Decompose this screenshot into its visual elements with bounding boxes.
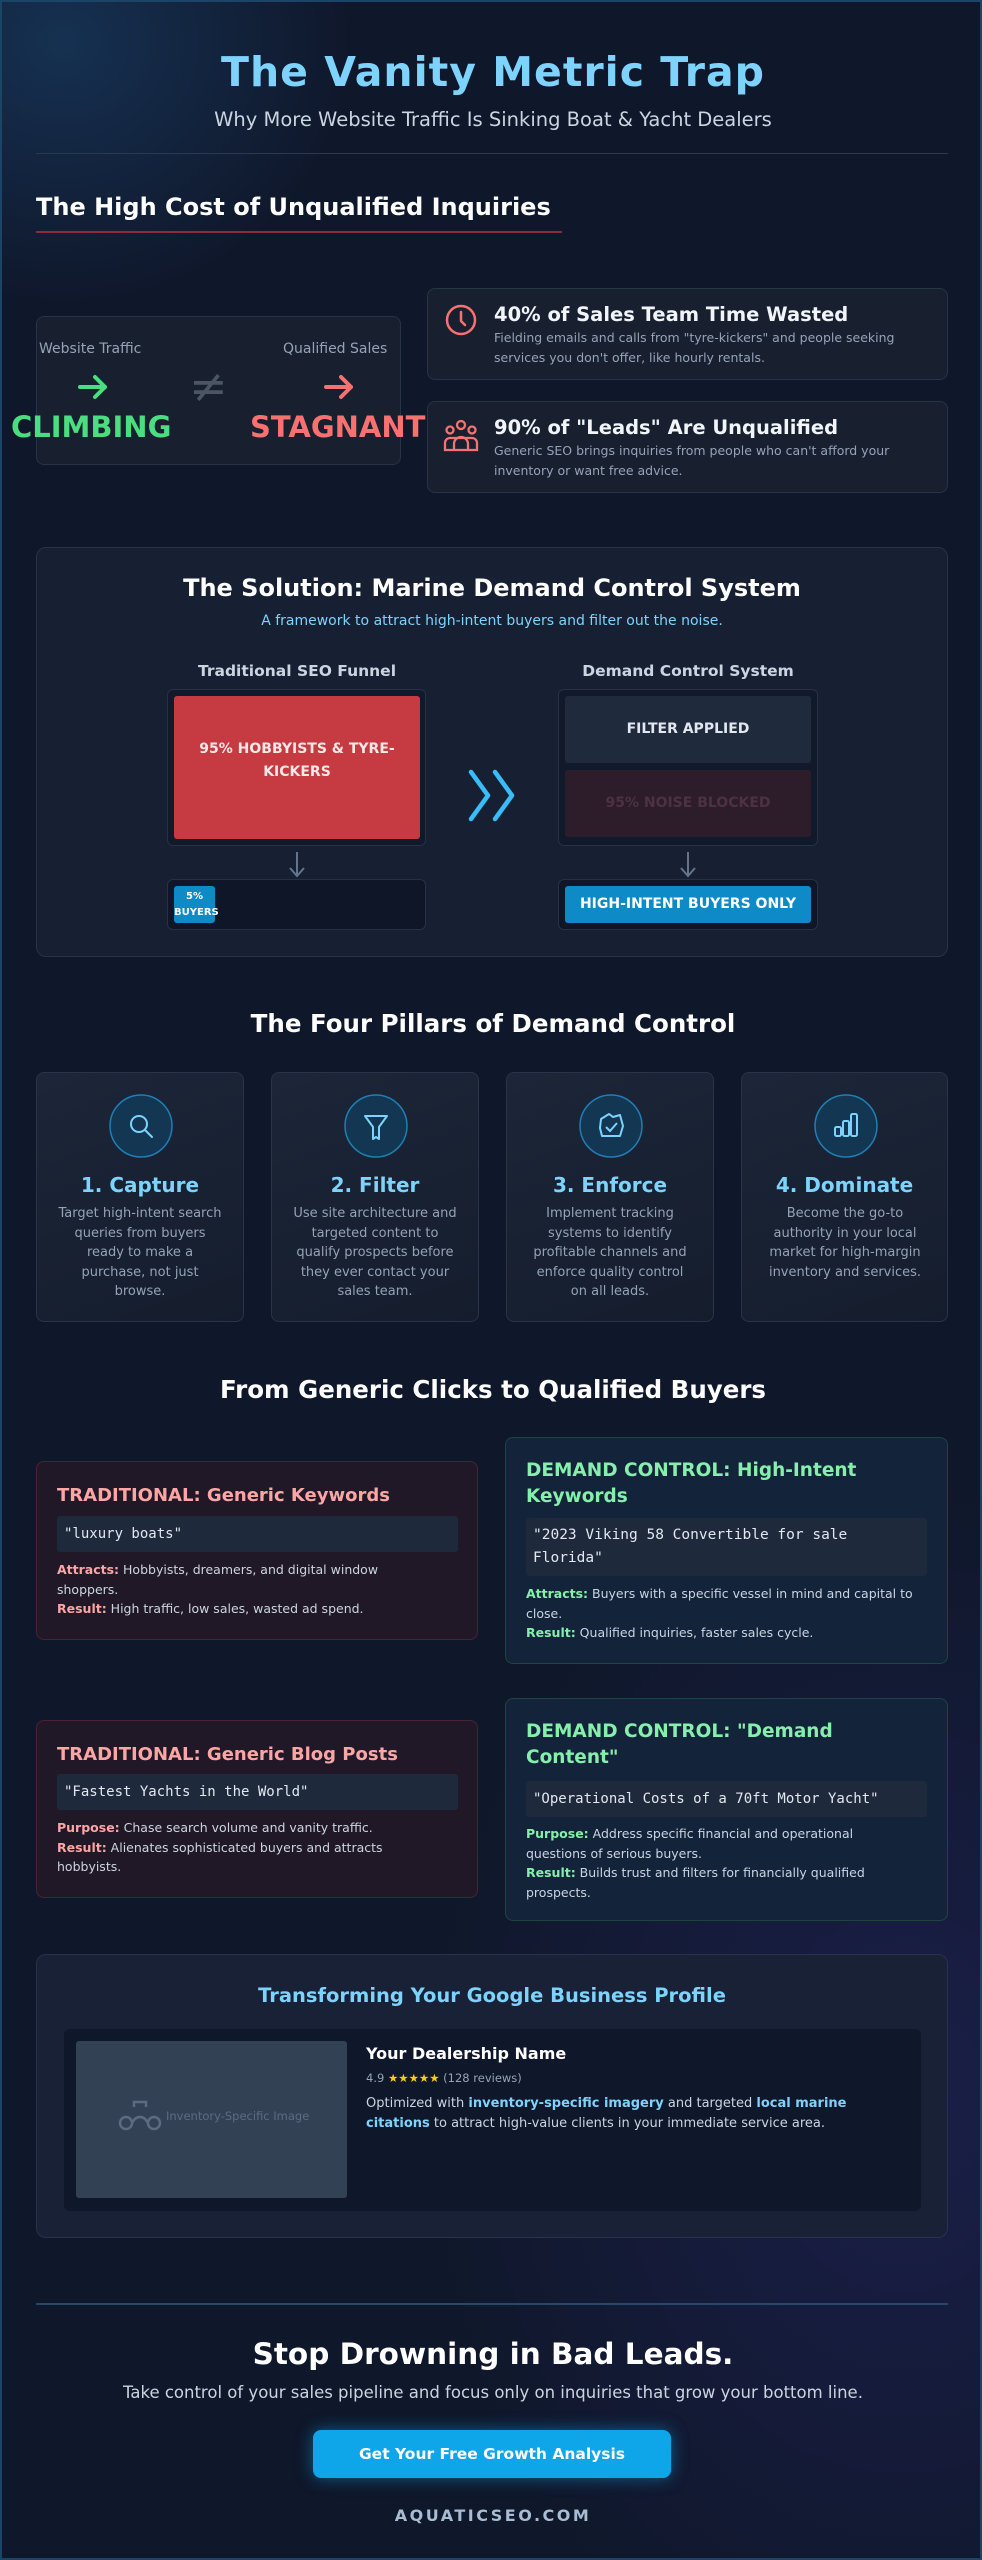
label: qualified sales: Qualified Sales <box>283 341 387 357</box>
funnel: demand control top <box>558 689 818 846</box>
funnel: traditional result: 5% <box>186 891 203 902</box>
subtitle: Why More Website Traffic Is Sinking Boat & Yacht Dealers <box>214 108 772 131</box>
title: The Vanity Metric Trap <box>221 48 765 96</box>
funnel: demand control top: 95% NOISE BLOCKED <box>605 795 771 811</box>
funnel: traditional top: 95% HOBBYISTS & TYRE-KICKERS <box>199 741 395 780</box>
card: demand content: DEMAND CONTROL: "Demand Content" <box>526 1721 833 1768</box>
pillar: enforce: on all leads. <box>571 1284 649 1299</box>
card: traditional keywords: Attracts: Hobbyists, dreamers, and digital window <box>57 1562 378 1577</box>
heading: high cost: The High Cost of Unqualified Inquiries <box>36 193 551 221</box>
card: demand keywords: DEMAND CONTROL: High-Intent Keywords <box>526 1460 856 1507</box>
stat card: 40%: 40% of Sales Team Time Wasted <box>494 303 848 326</box>
gbp mock listing: 4.9 ★★★★★ (128 reviews) <box>366 2071 522 2085</box>
cta button <box>313 2430 671 2478</box>
panel: traffic vs sales <box>36 316 401 465</box>
card: traditional blog <box>36 1720 478 1898</box>
pillar: enforce: systems to identify profitable channels and enforce quality control <box>533 1226 687 1280</box>
cta button: Get Your Free Growth Analysis <box>359 2445 625 2463</box>
card: demand content: Result: Builds trust and filters for financially qualified prospects. <box>526 1865 865 1900</box>
heading: gbp: Transforming Your Google Business Profile <box>258 1984 726 2007</box>
icon: red arrow <box>324 374 354 400</box>
pillar: capture <box>36 1072 244 1322</box>
card: demand content: "Operational Costs of a 70ft Motor Yacht" <box>533 1791 879 1807</box>
pillar: capture: 1. Capture <box>81 1173 199 1197</box>
stat card: 90% <box>427 401 948 493</box>
label: website traffic: Website Traffic <box>39 341 141 357</box>
pillar: filter: Use site architecture and targeted content to <box>293 1206 457 1240</box>
image placeholder: Inventory-Specific Image <box>166 2109 309 2123</box>
gbp mock listing: Optimized with inventory-specific imagery and targeted local marine citations to attract high-value clients in your immediate service area. <box>366 2096 846 2130</box>
card: traditional keywords: Result: High traffic, low sales, wasted ad spend. <box>57 1601 364 1616</box>
card: traditional blog: "Fastest Yachts in the World" <box>64 1784 308 1800</box>
heading: four pillars: The Four Pillars of Demand Control <box>251 1009 735 1038</box>
icon: people <box>444 420 478 452</box>
card: traditional keywords: "luxury boats" <box>64 1526 182 1542</box>
card: traditional blog: Result: Alienates sophisticated buyers and attracts hobbyists. <box>57 1840 383 1874</box>
gbp mock listing <box>64 2029 921 2211</box>
icon: search <box>109 1094 173 1158</box>
image placeholder <box>76 2041 347 2198</box>
heading: solution: The Solution: Marine Demand Control System <box>183 574 801 602</box>
footer brand: AQUATICSEO.COM <box>395 2506 591 2525</box>
pillar: filter: qualify prospects before they ever contact your sales team. <box>296 1245 454 1299</box>
stat card: 40%: Fielding emails and calls from "tyre-kickers" and people seeking services you don't offer, like hourly rentals. <box>494 330 894 365</box>
pillar: dominate: Become the go-to authority in your local market for high-margin inventory and services. <box>769 1206 921 1280</box>
text: climbing: CLIMBING <box>11 410 171 444</box>
funnel: demand result: HIGH-INTENT BUYERS ONLY <box>580 896 796 912</box>
arrow: demand down <box>680 852 696 878</box>
card: demand keywords: Result: Qualified inquiries, faster sales cycle. <box>526 1625 813 1640</box>
icon: chevrons <box>468 770 514 822</box>
text: stagnant: STAGNANT <box>250 410 425 444</box>
funnel: demand result <box>558 879 818 930</box>
label: traditional funnel: Traditional SEO Funnel <box>198 662 396 680</box>
card: traditional blog: TRADITIONAL: Generic Blog Posts <box>57 1744 398 1765</box>
card: demand content <box>505 1698 948 1921</box>
panel: solution <box>36 547 948 957</box>
icon: shield check <box>579 1094 643 1158</box>
card: traditional keywords: TRADITIONAL: Generic Keywords <box>57 1485 390 1506</box>
pillar: filter: 2. Filter <box>331 1173 419 1197</box>
panel: google business profile <box>36 1954 948 2238</box>
arrow: traditional down <box>289 852 305 878</box>
icon: funnel <box>344 1094 408 1158</box>
pillar: enforce <box>506 1072 714 1322</box>
heading: generic to qualified: From Generic Clicks to Qualified Buyers <box>220 1375 766 1404</box>
heading: high cost <box>36 193 562 233</box>
footer heading: Stop Drowning in Bad Leads. <box>253 2337 733 2371</box>
card: traditional keywords: shoppers. <box>57 1582 118 1596</box>
funnel: traditional top <box>167 689 426 846</box>
pillar: enforce: 3. Enforce <box>553 1173 667 1197</box>
icon: green arrow <box>78 374 108 400</box>
pillar: dominate <box>741 1072 948 1322</box>
pillar: filter <box>271 1072 479 1322</box>
footer subtext: Take control of your sales pipeline and focus only on inquiries that grow your bottom line. <box>123 2383 863 2402</box>
icon: not equal: ≠ <box>189 359 228 413</box>
stat card: 90%: Generic SEO brings inquiries from people who can't afford your inventory or want free advice. <box>494 443 889 478</box>
funnel: demand control top: FILTER APPLIED <box>627 721 749 737</box>
card: demand keywords: Attracts: Buyers with a specific vessel in mind and capital to close. <box>526 1586 913 1620</box>
card: traditional blog: Purpose: Chase search volume and vanity traffic. <box>57 1820 373 1835</box>
icon: bar chart <box>814 1094 878 1158</box>
pillar: dominate: 4. Dominate <box>776 1173 913 1197</box>
gbp mock listing: Your Dealership Name <box>366 2044 566 2063</box>
funnel: traditional result: BUYERS <box>174 907 219 918</box>
pillar: capture: Target high-intent search queries from buyers ready to make a purchase, not just browse. <box>58 1206 221 1299</box>
pillar: enforce: Implement tracking <box>546 1206 674 1221</box>
card: demand keywords: "2023 Viking 58 Convertible for sale Florida" <box>533 1527 847 1566</box>
stat card: 90%: 90% of "Leads" Are Unqualified <box>494 416 838 439</box>
label: demand control: Demand Control System <box>582 662 794 680</box>
subheading: A framework to attract high-intent buyers and filter out the noise. <box>261 613 723 629</box>
icon: clock <box>446 304 476 336</box>
stat card: 40% <box>427 288 948 380</box>
card: demand content: Purpose: Address specific financial and operational questions of serious buyers. <box>526 1826 853 1860</box>
funnel: traditional result <box>167 879 426 930</box>
card: traditional keywords <box>36 1461 478 1640</box>
card: demand keywords <box>505 1437 948 1664</box>
